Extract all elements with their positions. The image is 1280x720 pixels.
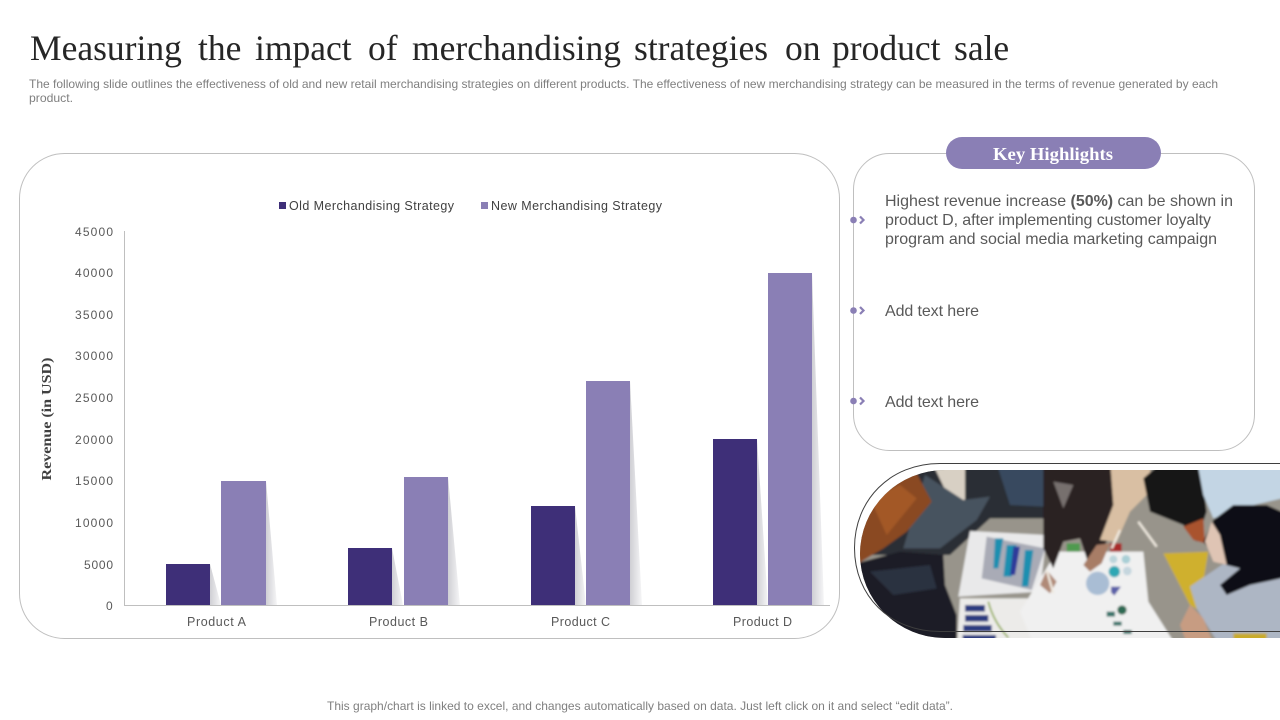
title: product (832, 28, 941, 68)
top right man (1142, 470, 1208, 528)
centre woman (1042, 470, 1114, 569)
y-axis tick labels: 5000 (84, 558, 113, 572)
bars: product D (713, 273, 812, 605)
top people (872, 470, 1045, 557)
heading: key highlights (946, 137, 1161, 169)
panel: key highlights (850, 137, 1254, 450)
title: impact (255, 28, 352, 68)
bar shadows (210, 273, 824, 605)
panel: revenue bar chart (20, 154, 840, 638)
footer note: This graph/chart is linked to excel, and changes automatically based on data. Just left click on it and select “edit data”. (327, 699, 953, 713)
subtitle description: product. (29, 91, 73, 105)
axes (124, 231, 830, 606)
y-axis tick labels: 35000 (75, 308, 113, 322)
highlight text 1: product D, after implementing customer loyalty (885, 212, 1211, 229)
subtitle description: The following slide outlines the effectiveness of old and new retail merchandising strategies on different products. The effectiveness of new merchandising strategy can be measured in the terms of revenue generated by each (29, 77, 1218, 91)
x-axis labels: Product C (551, 615, 610, 629)
title: strategies (634, 28, 768, 68)
papers (958, 531, 1047, 597)
chart legend: New Merchandising Strategy (491, 199, 663, 213)
y-axis tick labels: 25000 (75, 391, 113, 405)
highlight text 1 (885, 193, 1233, 248)
title: sale (954, 28, 1009, 68)
heading: key highlights: Key Highlights (993, 144, 1113, 164)
y-axis tick labels: 20000 (75, 433, 113, 447)
bars: product A (166, 481, 266, 605)
y-axis tick labels: 30000 (75, 349, 113, 363)
y-axis tick labels (75, 225, 113, 613)
highlight text 3: Add text here (885, 394, 979, 411)
title: Measuring (30, 28, 182, 68)
photo: team working over charts on floor (854, 463, 1280, 638)
floor (861, 470, 1280, 638)
x-axis labels: Product D (733, 615, 792, 629)
y-axis tick labels: 40000 (75, 266, 113, 280)
bars: product B (348, 477, 448, 605)
bars: product C (531, 381, 630, 605)
highlight text 1: Highest revenue increase (50%) can be shown in (885, 193, 1233, 210)
x-axis labels (187, 615, 792, 629)
title: on (785, 28, 821, 68)
chart legend: Old Merchandising Strategy (289, 199, 455, 213)
y-axis tick labels: 10000 (75, 516, 113, 530)
subtitle description (29, 77, 1218, 105)
y-axis tick labels: 45000 (75, 225, 113, 239)
y-axis tick labels: 0 (106, 599, 113, 613)
y-axis tick labels: 15000 (75, 474, 113, 488)
pillow (1163, 550, 1209, 610)
x-axis labels: Product B (369, 615, 428, 629)
y-axis title: Revenue (in USD) (40, 357, 55, 480)
x-axis labels: Product A (187, 615, 247, 629)
highlight text 2: Add text here (885, 303, 979, 320)
photo outline arc (854, 464, 1280, 632)
bullet icon 1 (850, 216, 864, 224)
bullet icon 2 (850, 307, 864, 314)
chart legend (279, 199, 663, 213)
title: of (368, 28, 398, 68)
right woman (1188, 564, 1280, 638)
bullet icon 3 (850, 398, 864, 404)
title: the (198, 28, 241, 68)
highlight text 1: program and social media marketing campaign (885, 231, 1217, 248)
title: merchandising (412, 28, 621, 68)
